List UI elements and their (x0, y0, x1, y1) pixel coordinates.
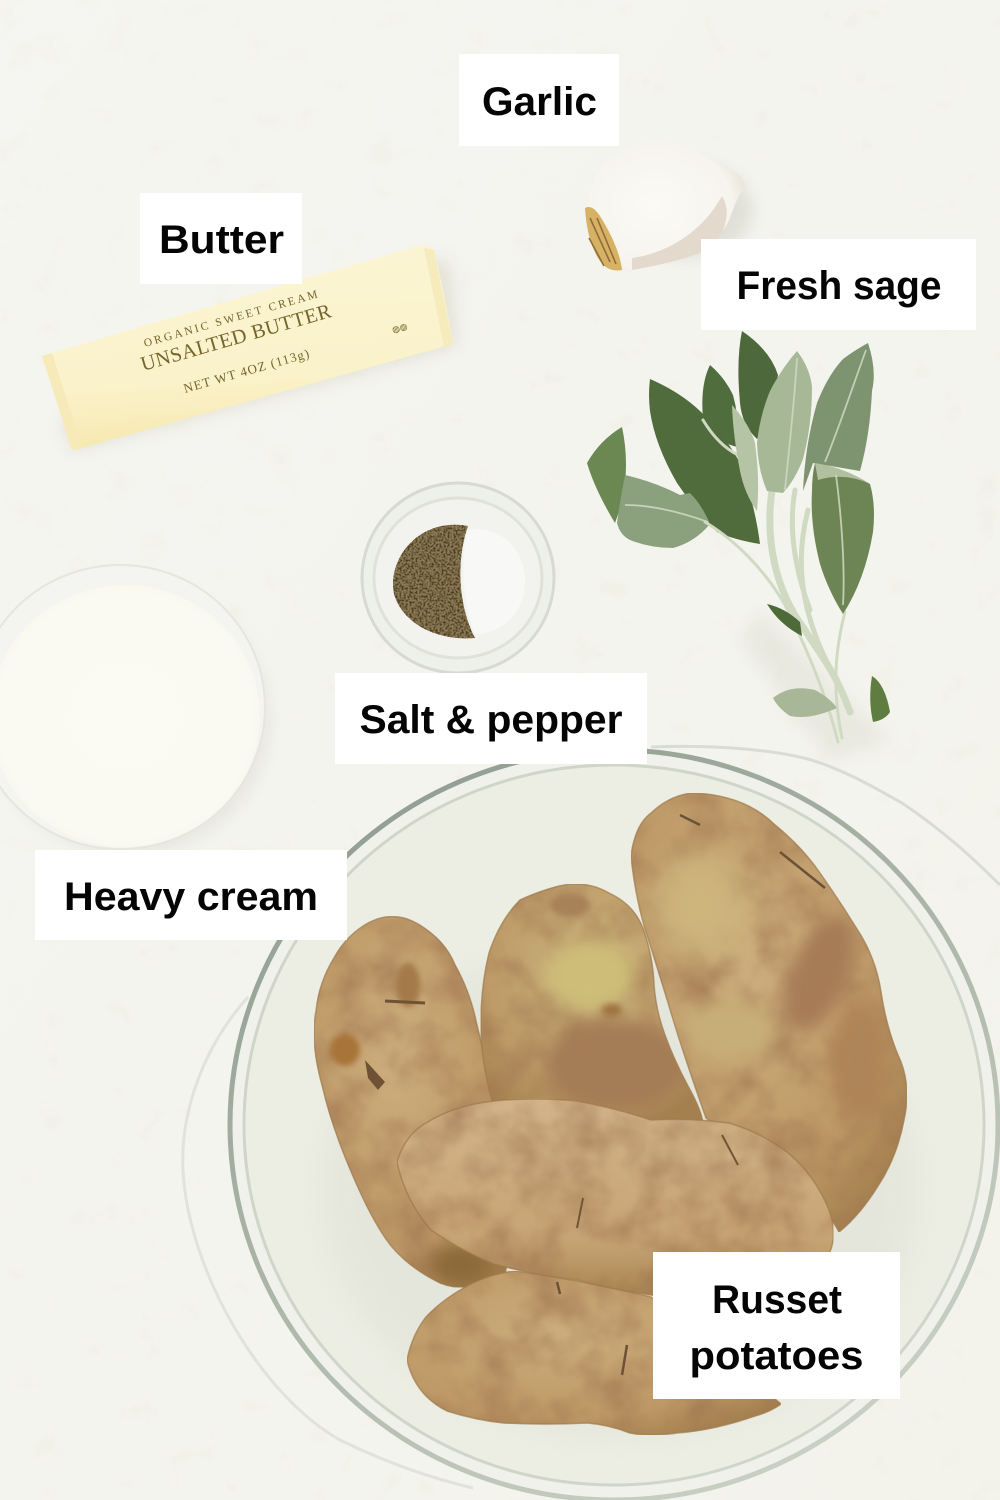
label: Butter (140, 193, 302, 284)
butter wrapper text: NET WT 4OZ (113g) (182, 346, 311, 396)
potato: right large (631, 793, 907, 1232)
potato: front (397, 1099, 834, 1299)
stems (703, 420, 850, 742)
label: Fresh sage: Fresh sage (736, 264, 942, 308)
label: Russet potatoes: potatoes (690, 1334, 864, 1378)
label: Russet potatoes (653, 1252, 900, 1399)
butter wrapper text: ◍◍ (391, 321, 409, 335)
sage bunch (587, 331, 890, 760)
leaves in front of stems (732, 351, 890, 722)
bowl handles (183, 997, 473, 1488)
butter wrapper text: UNSALTED BUTTER (138, 300, 334, 376)
leaf veins (625, 350, 866, 605)
glass bowl of potatoes (183, 746, 1000, 1500)
cream dish (0, 565, 270, 855)
glass dish of salt and pepper (362, 483, 554, 673)
butter wrapper text (138, 288, 409, 396)
label: Butter: Butter (159, 218, 284, 262)
butter wrapper text: ORGANIC SWEET CREAM (143, 288, 321, 350)
potato: left (314, 916, 508, 1288)
label: Heavy cream: Heavy cream (64, 875, 318, 919)
leaves behind stems (587, 331, 874, 548)
label: Garlic (459, 54, 619, 146)
potato: bottom (407, 1271, 781, 1435)
salt (463, 529, 525, 634)
potato: middle (481, 884, 703, 1125)
pepper (393, 525, 475, 638)
label: Salt & pepper (335, 673, 647, 764)
label: Salt & pepper: Salt & pepper (360, 698, 622, 742)
bowl body (230, 750, 998, 1500)
butter stick (42, 245, 458, 452)
label: Russet potatoes: Russet (712, 1278, 842, 1322)
garlic clove (585, 141, 753, 272)
label: Garlic: Garlic (482, 80, 597, 124)
label: Fresh sage (701, 239, 976, 330)
label: Heavy cream (35, 850, 347, 940)
